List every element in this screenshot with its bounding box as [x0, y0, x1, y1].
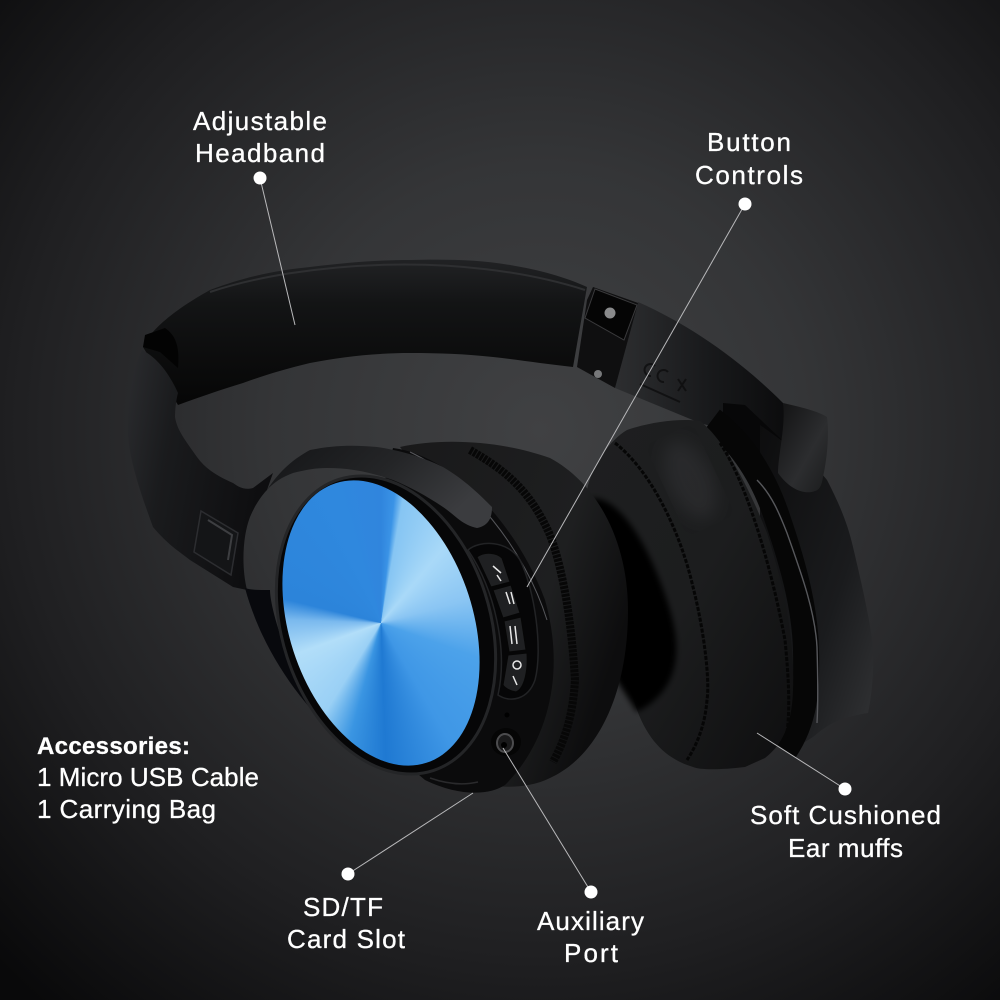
label: accessories	[37, 733, 259, 824]
pivot clip	[778, 403, 828, 492]
left arm	[128, 350, 273, 590]
label: accessories: Accessories:	[37, 733, 190, 760]
label: accessories: 1 Micro USB Cable	[37, 762, 259, 792]
label: sd/tf card slot	[287, 868, 406, 954]
disc rim	[240, 447, 532, 803]
button: mode	[503, 653, 527, 692]
label: soft cushioned ear muffs	[750, 782, 941, 863]
label: accessories: 1 Carrying Bag	[37, 794, 216, 824]
left ear shell	[330, 448, 554, 793]
label: soft cushioned ear muffs: Ear muffs	[788, 833, 903, 863]
label: soft cushioned ear muffs: Soft Cushioned	[750, 800, 941, 830]
label: adjustable headband: Headband	[195, 138, 325, 168]
yoke notch	[723, 403, 782, 470]
label: button controls: Button	[707, 127, 791, 157]
top shell fin	[267, 446, 492, 528]
mic hole	[504, 712, 510, 718]
arm logo button	[194, 511, 238, 575]
adjustable headband	[143, 260, 587, 405]
left ear cushion	[400, 442, 628, 787]
left cushion stitching	[470, 450, 575, 762]
right hanger arm	[615, 302, 795, 450]
label: adjustable headband: Adjustable	[193, 106, 327, 136]
button: volume down	[504, 617, 526, 652]
label: button controls	[695, 127, 803, 210]
sd card slot	[430, 778, 478, 784]
shell highlight line	[410, 452, 547, 620]
label: auxiliary port	[537, 886, 644, 968]
label: button controls: Controls	[695, 160, 803, 190]
label: auxiliary port: Port	[564, 938, 619, 968]
right cushion hole	[592, 498, 676, 712]
headphones	[128, 260, 873, 803]
right ear cushion	[587, 420, 793, 769]
button panel	[468, 543, 538, 699]
button: play	[477, 553, 510, 587]
label: sd/tf card slot: Card Slot	[287, 924, 406, 954]
right ear shell	[760, 425, 873, 753]
right cushion stitching	[615, 443, 789, 760]
right shell chrome ring	[712, 420, 806, 750]
headband hinge with screws	[577, 287, 638, 388]
label: auxiliary port: Auxiliary	[537, 906, 644, 936]
lower yoke crescent	[245, 588, 395, 770]
auxiliary port	[491, 728, 521, 756]
button: volume up	[493, 585, 520, 618]
leader lines	[260, 178, 845, 892]
right arm markings	[640, 364, 686, 402]
right cushion highlight	[652, 433, 728, 527]
blue metal disc	[250, 450, 520, 800]
label: sd/tf card slot: SD/TF	[303, 892, 383, 922]
label: adjustable headband	[193, 106, 327, 184]
